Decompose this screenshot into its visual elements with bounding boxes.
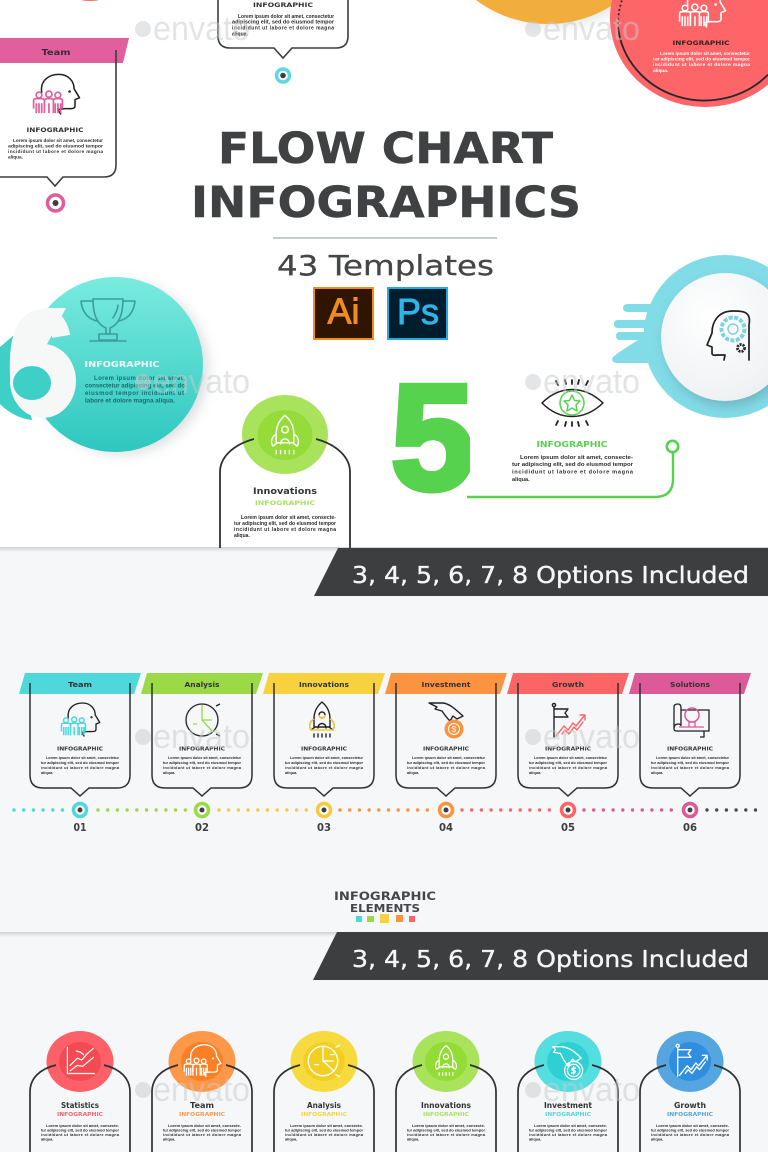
icon xyxy=(429,703,464,738)
icon: rocket xyxy=(272,415,298,454)
heading: Statistics xyxy=(61,1101,99,1110)
dotted arc xyxy=(618,0,622,24)
icon: head with people xyxy=(184,1045,221,1076)
marker xyxy=(196,804,208,816)
panel: step 6 solutions xyxy=(629,673,751,834)
body text xyxy=(85,376,185,404)
number: 01 xyxy=(74,822,86,834)
label: INFOGRAPHIC xyxy=(672,39,730,47)
body text xyxy=(285,755,364,775)
panel: step 5 growth xyxy=(507,673,629,834)
body text: aliqua. xyxy=(651,1136,663,1142)
watermarks: envato xyxy=(153,363,250,401)
heading: Team xyxy=(190,1101,214,1110)
arc outline xyxy=(518,1065,618,1152)
label: INFOGRAPHIC xyxy=(536,440,608,449)
body text xyxy=(41,755,120,775)
card body text: Lorem ipsum dolor sit amet, consectetur xyxy=(238,14,334,20)
watermarks: envato xyxy=(153,1071,250,1109)
body text: aliqua. xyxy=(529,1136,541,1142)
panel: step 4 investment xyxy=(385,673,507,834)
body text: aliqua. xyxy=(163,1136,175,1142)
circle xyxy=(290,1031,358,1092)
heading: Analysis xyxy=(307,1101,341,1110)
label: INFOGRAPHIC xyxy=(545,1112,591,1118)
circle xyxy=(46,1031,114,1092)
body text: incididunt ut labore et dolore magna xyxy=(529,765,608,770)
panel: number five xyxy=(392,379,680,498)
body text: tur adipiscing elit, sed do eiusmod tempor xyxy=(41,1128,119,1132)
body text: consectetur adipiscing elit, sed do xyxy=(85,384,185,390)
body text: Lorem ipsum dolor sit amet, consecte- xyxy=(534,1123,608,1128)
shadow xyxy=(665,280,768,406)
card outline xyxy=(518,683,618,796)
connector end xyxy=(667,441,678,452)
body text: tur adipiscing elit, sed do eiusmod tempor xyxy=(653,56,750,62)
number five: 5 xyxy=(391,353,474,521)
number: 02 xyxy=(195,822,209,834)
logo: infographic elements xyxy=(334,889,436,923)
card label: INFOGRAPHIC xyxy=(26,126,84,134)
number: 03 xyxy=(317,822,331,834)
card outline xyxy=(640,683,740,796)
circle xyxy=(656,1031,724,1092)
icon: Adobe Photoshop: Ps xyxy=(397,291,439,332)
panel: blue ring with head xyxy=(612,255,768,418)
green circle xyxy=(242,395,328,474)
number six: 6 xyxy=(6,279,76,447)
body text: tur adipiscing elit, sed do eiusmod tempor xyxy=(163,760,241,765)
watermarks: envato xyxy=(543,1071,640,1109)
number: 05 xyxy=(561,822,575,834)
body text: labore et dolore magna aliqua. xyxy=(85,398,175,404)
watermarks: envato xyxy=(543,10,640,48)
watermarks xyxy=(135,10,640,1109)
body text: tur adipiscing elit, sed do eiusmod tempor xyxy=(651,760,729,765)
card body text: aliqua. xyxy=(8,154,23,160)
label: INFOGRAPHIC xyxy=(423,1112,469,1118)
marker xyxy=(440,804,452,816)
logo: infographic elements: INFOGRAPHIC xyxy=(334,889,436,903)
panel: investment card lower xyxy=(518,1031,618,1152)
ribbon xyxy=(507,673,629,694)
teal tail xyxy=(0,335,32,420)
icon: eye with star xyxy=(542,380,603,426)
watermarks: envato xyxy=(153,718,250,756)
card body text: adipiscing elit, sed do eiusmod tempor xyxy=(232,20,334,26)
body text xyxy=(529,1123,608,1142)
body text: incididunt ut labore et dolore magna xyxy=(41,1132,120,1137)
heading: Investment xyxy=(422,680,471,689)
banner: options included bottom: 3, 4, 5, 6, 7, 8 Options Included xyxy=(352,946,749,973)
body text: incididunt ut labore et dolore magna xyxy=(653,62,750,68)
label: INFOGRAPHIC xyxy=(301,1112,347,1118)
body text: incididunt ut labore et dolore magna xyxy=(407,765,486,770)
banner: options included top: 3, 4, 5, 6, 7, 8 Options Included xyxy=(352,562,749,589)
card outline xyxy=(30,683,130,796)
panel: teal number six circle xyxy=(0,277,208,454)
panel: team card xyxy=(152,1031,252,1152)
icon: pie xyxy=(308,1045,340,1077)
arc outline xyxy=(274,1065,374,1152)
body text: tur adipiscing elit, sed do eiusmod tempor xyxy=(234,521,336,527)
body text: Lorem ipsum dolor sit amet, xyxy=(94,376,185,382)
body text: tur adipiscing elit, sed do eiusmod tempor xyxy=(512,462,634,468)
body text: tur adipiscing elit, sed do eiusmod tempor xyxy=(163,1128,241,1132)
marker xyxy=(318,804,330,816)
body text: Lorem ipsum dolor sit amet, consectetur xyxy=(534,755,607,760)
label: INFOGRAPHIC xyxy=(84,360,160,369)
card outline xyxy=(0,50,116,186)
card body text: adipiscing elit, sed do eiusmod tempor xyxy=(8,144,103,148)
icon xyxy=(62,703,100,736)
card body text: Lorem ipsum dolor sit amet, consectetur xyxy=(13,138,103,143)
heading: Solutions xyxy=(670,680,711,689)
shape: orange circle xyxy=(428,0,674,26)
body text: Lorem ipsum dolor sit amet, consecte- xyxy=(520,455,633,461)
body text: tur adipiscing elit, sed do eiusmod tempor xyxy=(529,760,607,765)
icon: head with gear xyxy=(707,311,749,360)
body text: incididunt ut labore et dolore magna xyxy=(234,527,336,533)
body text: incididunt ut labore et dolore magna xyxy=(163,1132,242,1137)
body text: incididunt ut labore et dolore magna xyxy=(163,765,242,770)
body text xyxy=(163,1123,242,1142)
panel: timeline dots xyxy=(14,808,757,812)
icon: chart xyxy=(67,1047,94,1074)
icon: $ xyxy=(452,725,457,734)
heading: Team xyxy=(68,680,92,689)
panel: top-center card xyxy=(218,0,348,82)
watermarks: envato xyxy=(543,718,640,756)
panel: statistics card xyxy=(30,1031,130,1152)
card body text: aliqua. xyxy=(232,32,248,38)
inner arc xyxy=(618,27,768,101)
icon xyxy=(552,703,585,737)
body text: incididunt ut labore et dolore magna xyxy=(41,765,120,770)
body text: incididunt ut labore et dolore magna xyxy=(651,1132,730,1137)
panel: red circle xyxy=(610,0,768,107)
heading: Analysis xyxy=(184,680,220,689)
timeline marker xyxy=(48,195,64,211)
heading: Innovations xyxy=(253,487,317,497)
icon: Adobe Illustrator: Ai xyxy=(327,290,360,332)
ribbon xyxy=(629,673,751,694)
body text: Lorem ipsum dolor sit amet, consectetur xyxy=(656,755,729,760)
body text: incididunt ut labore et dolore magna xyxy=(285,765,364,770)
watermarks: envato xyxy=(153,10,250,48)
icon xyxy=(310,702,334,737)
icon xyxy=(674,704,709,737)
label: INFOGRAPHIC xyxy=(423,746,469,752)
body text: incididunt ut labore et dolore magna xyxy=(529,1132,608,1137)
body text xyxy=(285,1123,364,1142)
timeline marker xyxy=(276,69,290,82)
body text: Lorem ipsum dolor sit amet, consecte- xyxy=(290,1123,364,1128)
body text xyxy=(407,755,486,775)
body text: aliqua. xyxy=(285,770,297,775)
body text: tur adipiscing elit, sed do eiusmod tempor xyxy=(529,1128,607,1132)
connector line xyxy=(467,453,673,497)
arc outline xyxy=(396,1065,496,1152)
ribbon xyxy=(385,673,507,694)
body text xyxy=(234,515,336,539)
label: INFOGRAPHIC xyxy=(545,746,591,752)
label: INFOGRAPHIC xyxy=(179,746,225,752)
body text xyxy=(163,755,242,775)
panel: lower section background xyxy=(0,547,768,1152)
body text xyxy=(41,1123,120,1142)
circle xyxy=(534,1031,602,1092)
banner: options included bottom xyxy=(313,932,768,980)
panel: step 1 team xyxy=(19,673,141,834)
ribbon xyxy=(263,673,385,694)
teal circle xyxy=(27,277,203,452)
inner circle xyxy=(258,410,312,460)
card body text xyxy=(232,14,334,38)
title: FLOW CHART xyxy=(218,125,553,174)
body text: aliqua. xyxy=(529,770,541,775)
body text: eiusmod tempor incididunt ut xyxy=(85,391,184,397)
body text: Lorem ipsum dolor sit amet, consectetur xyxy=(660,51,750,57)
panel: step 3 innovations xyxy=(263,673,385,834)
body text: Lorem ipsum dolor sit amet, consectetur xyxy=(46,755,119,760)
logo: infographic elements: ELEMENTS xyxy=(350,903,420,915)
circle xyxy=(168,1031,236,1092)
body text xyxy=(407,1123,486,1142)
arc outline xyxy=(152,1065,252,1152)
panel: innovations card xyxy=(220,395,350,548)
icon xyxy=(186,704,220,736)
body text: aliqua. xyxy=(41,1136,53,1142)
body text xyxy=(512,455,634,483)
icon: flag with growth line xyxy=(676,1044,707,1076)
label: INFOGRAPHIC xyxy=(667,1112,713,1118)
card label: INFOGRAPHIC xyxy=(253,1,313,9)
body text xyxy=(653,51,750,74)
ribbon xyxy=(19,673,141,694)
body text: tur adipiscing elit, sed do eiusmod tempor xyxy=(407,1128,485,1132)
number: 04 xyxy=(439,822,453,834)
body text: tur adipiscing elit, sed do eiusmod tempor xyxy=(651,1128,729,1132)
icon: Adobe Illustrator xyxy=(314,288,373,339)
body text: Lorem ipsum dolor sit amet, consecte- xyxy=(656,1123,730,1128)
title xyxy=(191,125,581,228)
card body text: incididunt ut labore et dolore magna xyxy=(232,26,334,32)
body text: Lorem ipsum dolor sit amet, consectetur xyxy=(290,755,363,760)
shadow xyxy=(36,282,208,454)
number: 06 xyxy=(683,822,697,834)
card outline xyxy=(274,683,374,796)
card body text xyxy=(8,138,103,160)
body text: Lorem ipsum dolor sit amet, consecte- xyxy=(168,1123,242,1128)
body text: aliqua. xyxy=(512,477,530,483)
body text: aliqua. xyxy=(651,770,663,775)
top-left red circle fragment xyxy=(70,0,110,1)
icon: Adobe Photoshop xyxy=(388,288,447,339)
icon: coin with hand xyxy=(553,1047,583,1079)
circle xyxy=(412,1031,480,1092)
blue ring xyxy=(644,255,768,418)
body text: tur adipiscing elit, sed do eiusmod tempor xyxy=(285,1128,363,1132)
label: INFOGRAPHIC xyxy=(667,746,713,752)
body text: Lorem ipsum dolor sit amet, consecte- xyxy=(241,515,336,521)
body text: Lorem ipsum dolor sit amet, consecte- xyxy=(412,1123,486,1128)
card outline xyxy=(152,683,252,796)
panel: analysis card xyxy=(274,1031,374,1152)
panel: top-left team card xyxy=(0,38,129,211)
divider xyxy=(273,237,497,239)
heading: Investment xyxy=(544,1101,592,1110)
body text: aliqua. xyxy=(285,1136,297,1142)
banner: options included top xyxy=(314,548,768,596)
team heading: Team xyxy=(42,48,70,57)
body text: Lorem ipsum dolor sit amet, consecte- xyxy=(46,1123,120,1128)
body text: aliqua. xyxy=(407,770,419,775)
body text: incididunt ut labore et dolore magna xyxy=(407,1132,486,1137)
body text: tur adipiscing elit, sed do eiusmod tempor xyxy=(407,760,485,765)
body text: incididunt ut labore et dolore magna xyxy=(651,765,730,770)
ribbon xyxy=(141,673,263,694)
panel: growth card lower xyxy=(640,1031,740,1152)
body text: aliqua. xyxy=(407,1136,419,1142)
body text: aliqua. xyxy=(653,68,668,74)
body text: Lorem ipsum dolor sit amet, consectetur xyxy=(168,755,241,760)
body text: tur adipiscing elit, sed do eiusmod tempor xyxy=(285,760,363,765)
icon: trophy xyxy=(81,299,135,341)
body text xyxy=(529,755,608,775)
heading: Innovations xyxy=(421,1101,471,1110)
watermarks: envato xyxy=(543,363,640,401)
card outline xyxy=(218,0,348,58)
body text: aliqua. xyxy=(41,770,53,775)
team ribbon xyxy=(0,38,129,63)
circle xyxy=(610,0,768,107)
card body text: incididunt ut labore et dolore magna xyxy=(8,149,103,154)
panel: step 2 analysis xyxy=(141,673,263,834)
marker xyxy=(684,804,696,816)
arc outline xyxy=(30,1065,130,1152)
label: INFOGRAPHIC xyxy=(179,1112,225,1118)
icon: head with people xyxy=(34,74,80,114)
heading: Growth xyxy=(552,680,584,689)
label: INFOGRAPHIC xyxy=(57,746,103,752)
marker xyxy=(74,804,86,816)
arc outline xyxy=(640,1065,740,1152)
subtitle: 43 Templates xyxy=(277,249,494,282)
body text: aliqua. xyxy=(163,770,175,775)
icon: rocket xyxy=(436,1046,456,1075)
marker xyxy=(562,804,574,816)
body text xyxy=(651,1123,730,1142)
body text: incididunt ut labore et dolore magna xyxy=(512,470,634,476)
label: INFOGRAPHIC xyxy=(57,1112,103,1118)
white disc xyxy=(661,273,768,401)
panel: innovations card lower xyxy=(396,1031,496,1152)
label: INFOGRAPHIC xyxy=(301,746,347,752)
heading: Growth xyxy=(674,1101,706,1110)
body text: Lorem ipsum dolor sit amet, consectetur xyxy=(412,755,485,760)
speed tabs xyxy=(612,304,660,363)
card arc outline xyxy=(220,439,350,548)
label: INFOGRAPHIC xyxy=(255,499,315,507)
heading: Innovations xyxy=(299,680,350,689)
title: INFOGRAPHICS xyxy=(191,179,581,228)
body text: tur adipiscing elit, sed do eiusmod tempor xyxy=(41,760,119,765)
icon: head with people xyxy=(680,0,726,27)
body text xyxy=(651,755,730,775)
card outline xyxy=(396,683,496,796)
body text: aliqua. xyxy=(234,533,250,539)
body text: incididunt ut labore et dolore magna xyxy=(285,1132,364,1137)
